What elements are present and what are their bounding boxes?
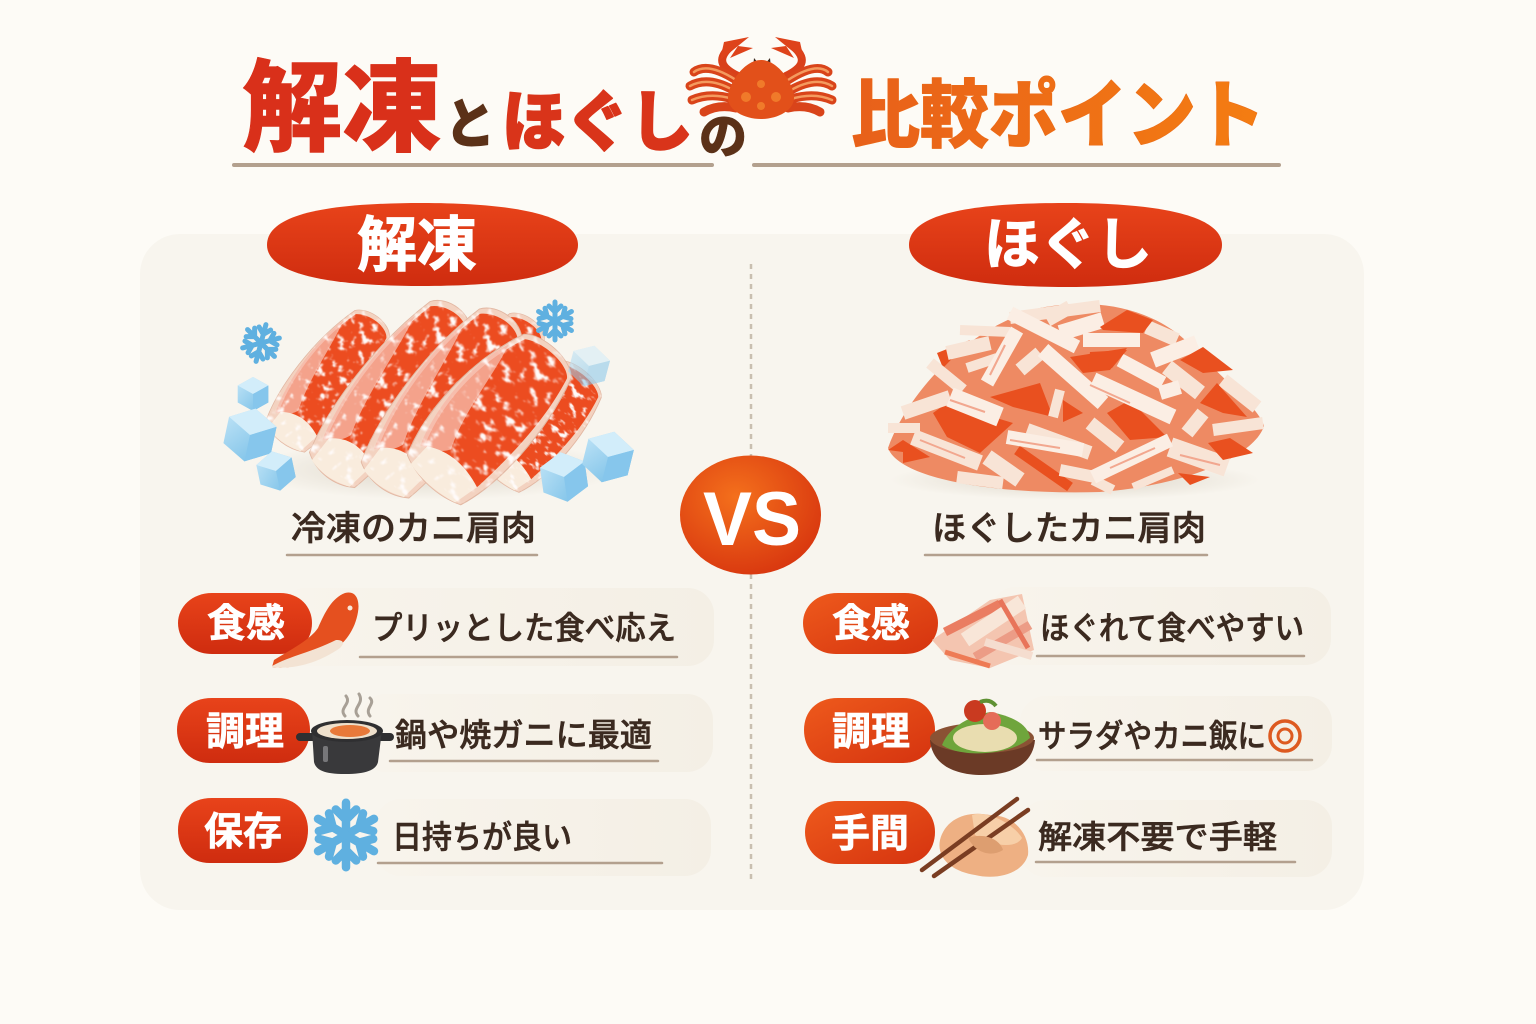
caption: shredded: ほぐしたカニ肩肉 (932, 510, 1206, 548)
row: left texture: 食感 (207, 603, 285, 646)
row: right effort: 手間 (831, 813, 909, 856)
title (242, 53, 1265, 165)
panel: left heading pill: 解凍 (357, 212, 477, 279)
row: right cooking: サラダやカニ飯に (1038, 718, 1266, 754)
title underlines (234, 163, 1279, 167)
panel: right heading pill: ほぐし (984, 213, 1152, 276)
caption: frozen: 冷凍のカニ肩肉 (291, 510, 536, 548)
image: shredded crab pile (888, 304, 1264, 500)
row: left cooking: 調理 (206, 711, 284, 754)
icon: hand with chopsticks (922, 799, 1028, 877)
row: left storage (178, 798, 711, 876)
row: right texture: ほぐれて食べやすい (1040, 610, 1304, 646)
ice cubes (221, 341, 637, 505)
title: の (699, 111, 747, 164)
image: frozen crab legs with ice (221, 284, 637, 517)
icon: snowflake (313, 803, 379, 867)
row: left texture: プリッとした食べ応え (372, 610, 676, 646)
title: 解凍 (242, 53, 442, 165)
row: right cooking: 調理 (832, 711, 910, 754)
icon: shredded crab (932, 594, 1034, 668)
icon: rice salad bowl (930, 700, 1035, 775)
VS badge (680, 456, 821, 574)
row: left cooking (177, 694, 713, 774)
row: right texture: 食感 (832, 603, 910, 646)
row: left texture (178, 588, 714, 668)
title: ほぐし (502, 85, 693, 159)
icon: crab leg (272, 592, 358, 668)
title: と (445, 95, 495, 155)
icon: pot (300, 694, 390, 774)
icon: double circle (1270, 721, 1300, 751)
center divider (750, 264, 752, 880)
VS badge: VS (703, 477, 801, 562)
panel: right heading pill (909, 203, 1222, 287)
panel: left heading pill (267, 203, 578, 286)
panel: comparison background (140, 234, 1364, 910)
row: left cooking: 鍋や焼ガニに最適 (395, 717, 652, 753)
row: right cooking (804, 696, 1332, 775)
row: left storage: 保存 (204, 811, 282, 854)
row: right effort: 解凍不要で手軽 (1038, 819, 1277, 855)
row: left storage: 日持ちが良い (392, 819, 572, 855)
icon: crab (690, 37, 832, 119)
title: 比較ポイント (851, 74, 1265, 157)
snowflakes (237, 302, 574, 366)
row: right effort (805, 799, 1332, 877)
row: right texture (803, 587, 1331, 668)
